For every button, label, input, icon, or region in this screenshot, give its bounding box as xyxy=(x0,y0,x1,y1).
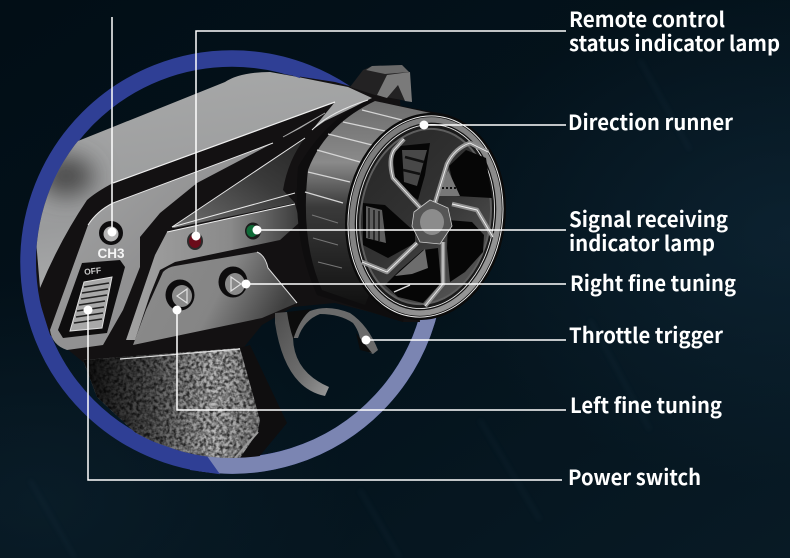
top fin xyxy=(350,65,412,102)
callout: remote control status indicator lamp xyxy=(192,4,780,240)
callout: left fine tuning: Left fine tuning xyxy=(570,390,722,420)
callout: signal receiving indicator lamp: indicator lamp xyxy=(569,228,715,258)
grip side xyxy=(240,345,287,458)
red lamp xyxy=(187,232,203,250)
upper grey shell xyxy=(36,72,372,288)
power switch xyxy=(58,260,125,338)
callout: left fine tuning xyxy=(172,306,722,420)
callout: direction runner xyxy=(420,107,734,137)
callout: signal receiving indicator lamp: Signal receiving xyxy=(569,204,728,234)
callout: CH3 xyxy=(108,17,116,236)
callout: remote control status indicator lamp: status indicator lamp xyxy=(569,28,780,58)
grip xyxy=(83,348,260,458)
spoke bands xyxy=(391,139,426,214)
light ring segment xyxy=(200,215,436,466)
callout: power switch xyxy=(84,306,701,492)
knurled dial xyxy=(297,100,450,322)
callout: throttle trigger: Throttle trigger xyxy=(569,320,724,350)
ch3 label: CH3 xyxy=(97,246,125,261)
callout: throttle trigger xyxy=(362,320,724,350)
shell shadow xyxy=(38,156,94,196)
trigger xyxy=(275,308,378,396)
callout: right fine tuning: Right fine tuning xyxy=(570,268,736,298)
lamp strip xyxy=(126,204,300,340)
controller xyxy=(36,65,519,465)
hub xyxy=(412,200,452,244)
brake disc details xyxy=(402,150,427,186)
side panel with CH3 xyxy=(50,143,273,350)
wheel xyxy=(332,102,519,331)
green lamp xyxy=(245,222,261,240)
left tuning button xyxy=(166,280,194,310)
lower button panel xyxy=(133,252,297,345)
controller body base xyxy=(36,72,420,362)
wheel windows xyxy=(393,143,430,200)
callout: right fine tuning xyxy=(242,268,736,298)
off label: OFF xyxy=(84,265,102,277)
right tuning button xyxy=(218,266,248,298)
callout: direction runner: Direction runner xyxy=(568,107,734,137)
blue ring xyxy=(28,58,436,474)
switch slider xyxy=(70,277,112,331)
callout: remote control status indicator lamp: Remote control xyxy=(569,4,725,34)
callout: power switch: Power switch xyxy=(568,462,701,492)
dark spike panel xyxy=(172,138,305,228)
CH3 button xyxy=(98,221,124,258)
callout: signal receiving indicator lamp xyxy=(252,204,728,258)
